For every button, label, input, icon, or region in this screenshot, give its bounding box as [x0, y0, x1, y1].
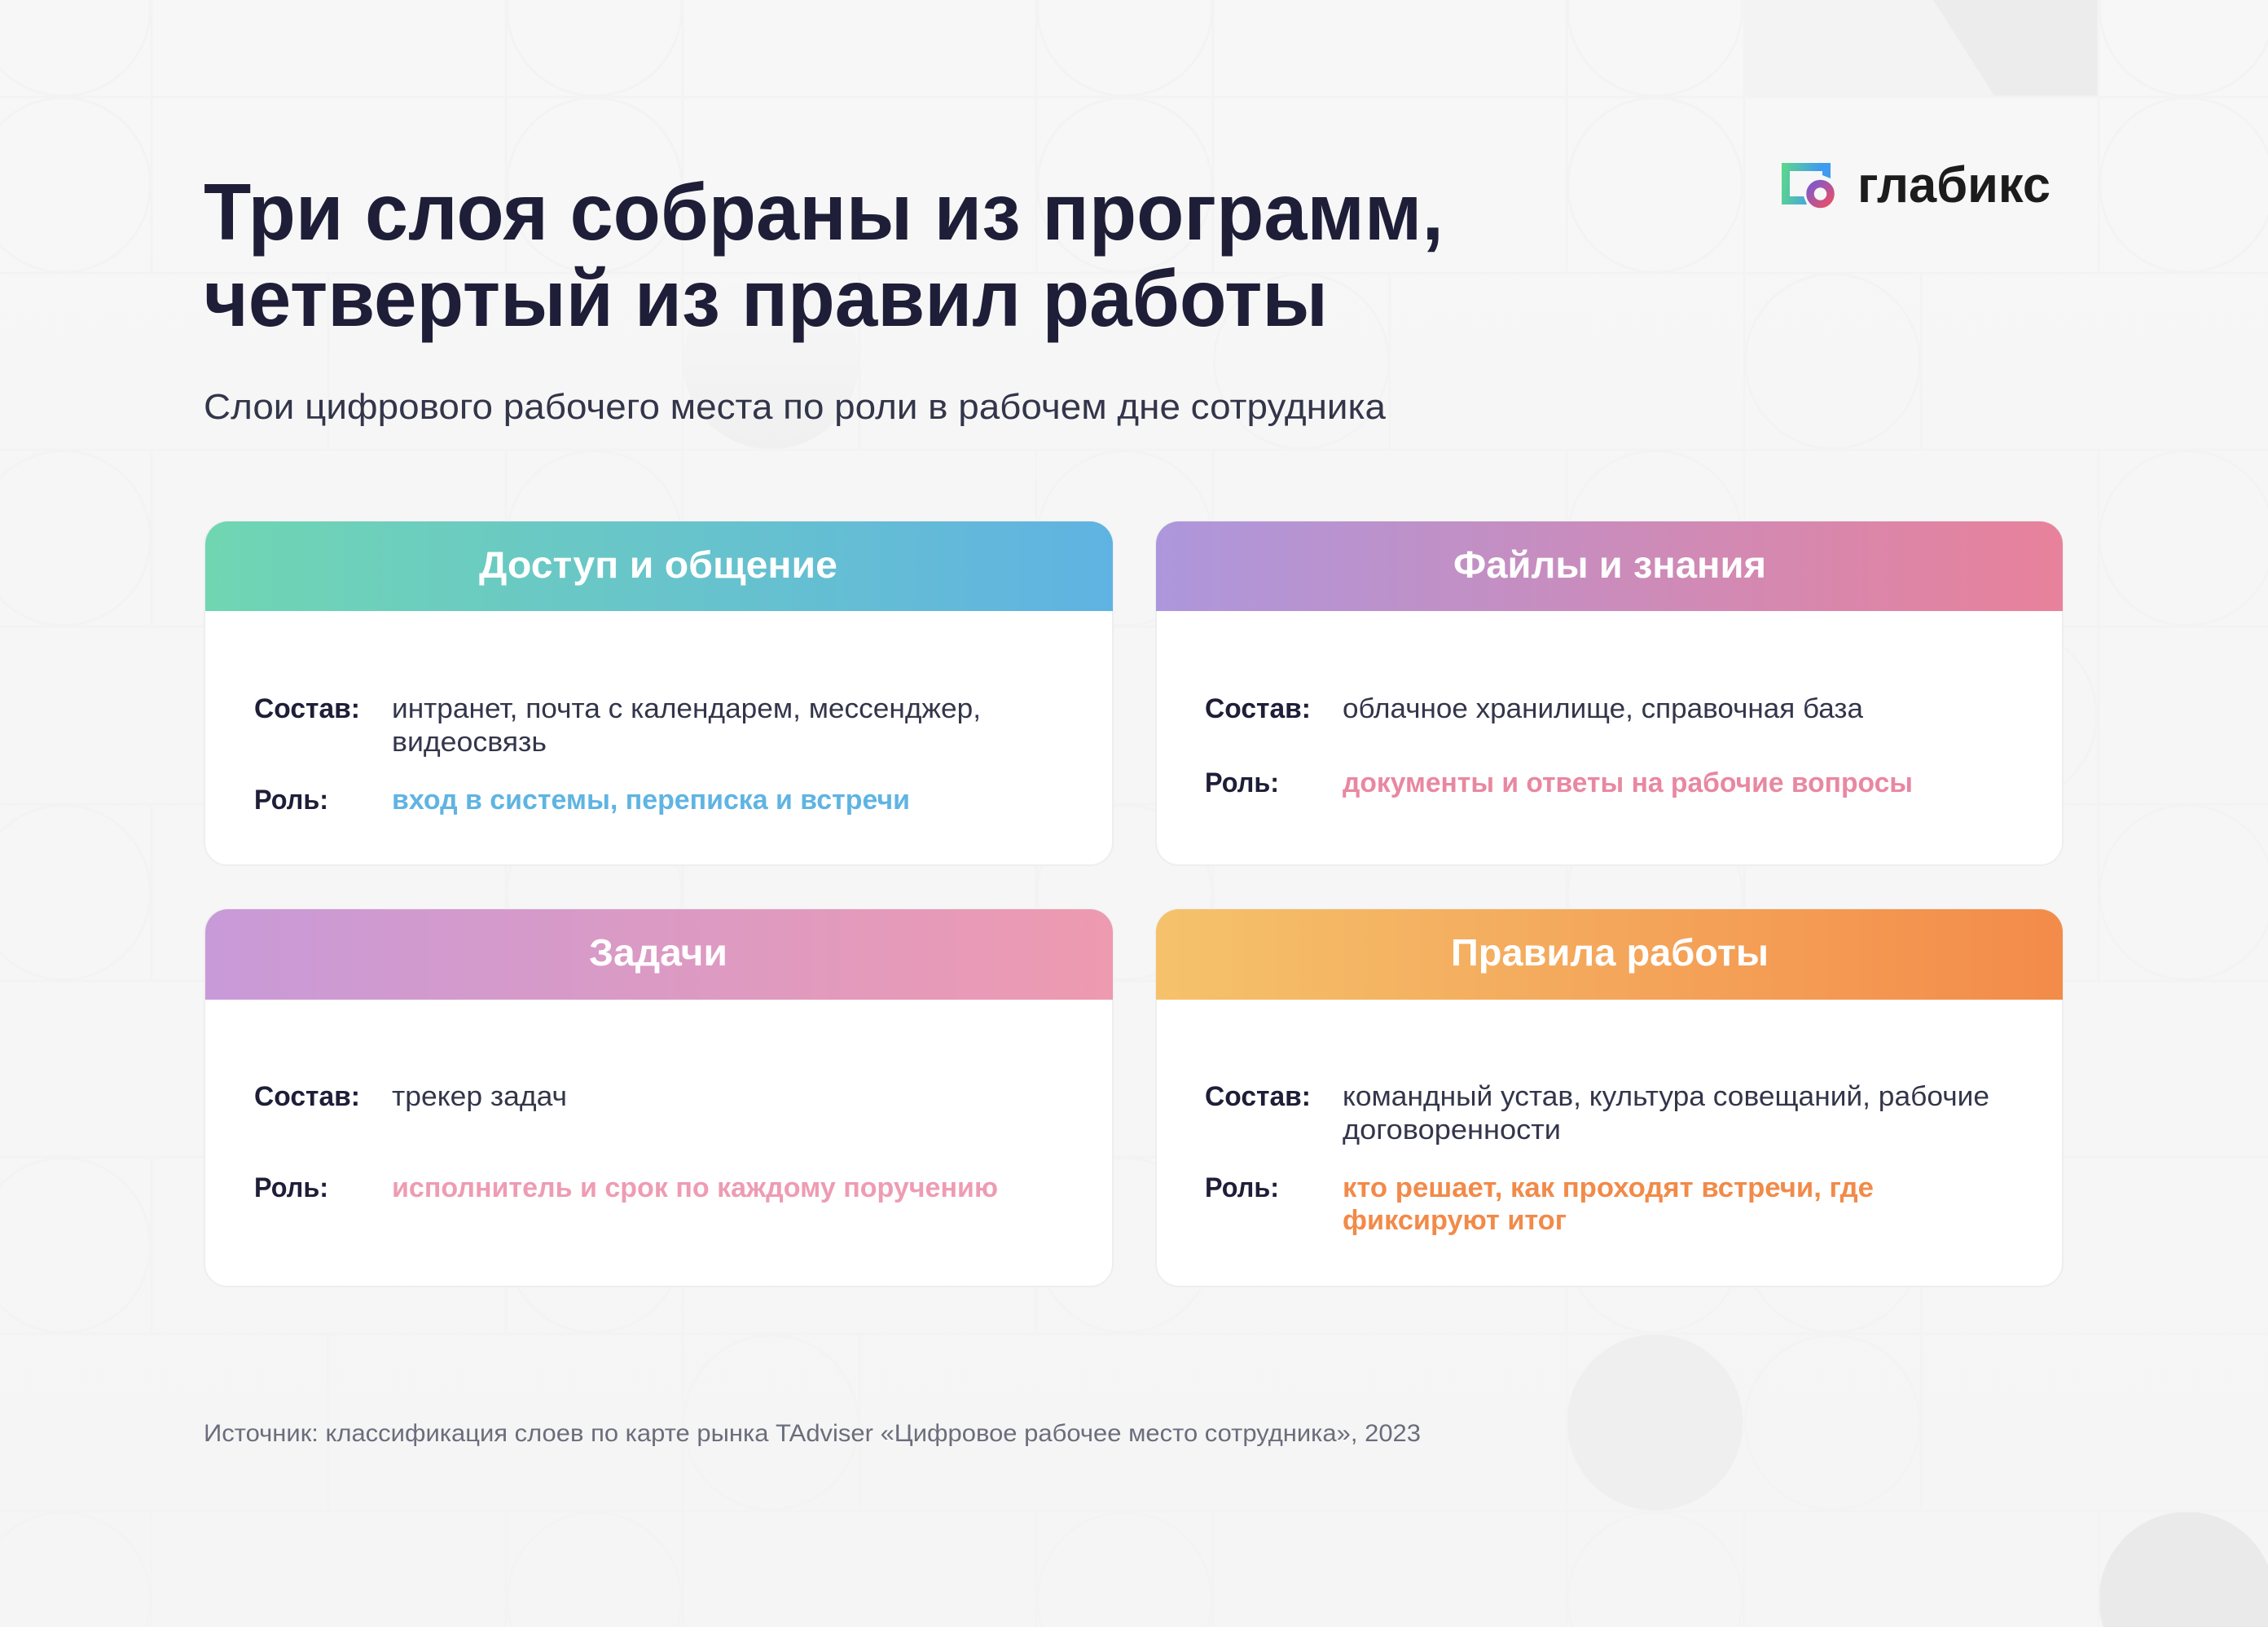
composition text: интранет, почта с календарем, мессенджер,: [392, 693, 981, 724]
title: четвертый из правил работы: [204, 253, 1328, 343]
composition label: Состав:: [254, 693, 360, 724]
title: [204, 167, 1444, 343]
role text: документы и ответы на рабочие вопросы: [1343, 767, 1913, 798]
composition text: облачное хранилище, справочная база: [1343, 693, 1863, 724]
panel: Файлы и знания: [1156, 521, 2063, 865]
composition text: [392, 693, 981, 758]
subtitle: Слои цифрового рабочего места по роли в рабочем дне сотрудника: [204, 387, 1387, 427]
role text: вход в системы, переписка и встречи: [392, 785, 910, 816]
heading: Правила работы: Правила работы: [1451, 931, 1769, 974]
role label: Роль:: [254, 1172, 328, 1203]
source footnote: Источник: классификация слоев по карте рынка TAdviser «Цифровое рабочее место сотрудника», 2023: [204, 1420, 1421, 1447]
composition label: Состав:: [1205, 693, 1311, 724]
heading: Файлы и знания: Файлы и знания: [1453, 543, 1766, 586]
composition text: [1343, 1081, 1989, 1145]
role label: Роль:: [254, 785, 328, 816]
role text: фиксируют итог: [1343, 1205, 1567, 1236]
title: Три слоя собраны из программ,: [204, 167, 1444, 257]
panel: Доступ и общение: [204, 521, 1113, 865]
panel: Задачи: [204, 909, 1113, 1286]
panel: Правила работы: [1156, 909, 2063, 1286]
composition text: видеосвязь: [392, 727, 547, 758]
composition text: командный устав, культура совещаний, рабочие: [1343, 1081, 1989, 1112]
heading: Доступ и общение: Доступ и общение: [479, 543, 837, 586]
composition text: договоренности: [1343, 1115, 1561, 1145]
logo wordmark: глабикс: [1857, 157, 2050, 213]
role text: исполнитель и срок по каждому поручению: [392, 1172, 998, 1203]
composition label: Состав:: [254, 1081, 360, 1112]
composition label: Состав:: [1205, 1081, 1311, 1112]
role text: [1343, 1172, 1874, 1236]
icon: logo frame and ring: [1782, 163, 1831, 204]
role label: Роль:: [1205, 767, 1279, 798]
composition text: трекер задач: [392, 1081, 567, 1112]
role text: кто решает, как проходят встречи, где: [1343, 1172, 1874, 1203]
role label: Роль:: [1205, 1172, 1279, 1203]
logo: глабикс: [1782, 157, 2050, 213]
heading: Задачи: Задачи: [589, 931, 727, 974]
